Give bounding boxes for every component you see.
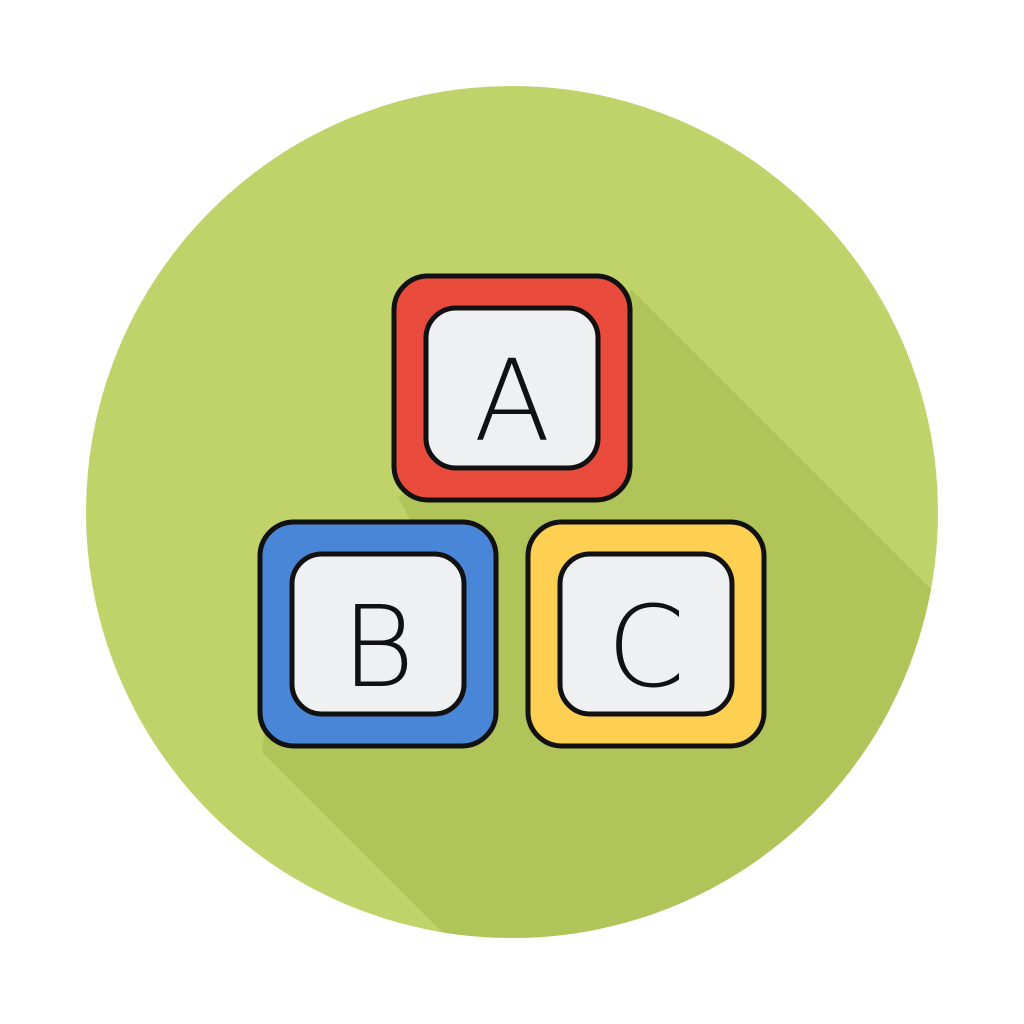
block A: [394, 276, 630, 500]
block B: B: [341, 583, 415, 713]
long shadow: [262, 290, 931, 938]
block B: [260, 522, 496, 746]
block A: A: [474, 337, 550, 467]
block C: [528, 522, 764, 746]
background circle: [86, 86, 938, 938]
block C: C: [607, 583, 685, 713]
